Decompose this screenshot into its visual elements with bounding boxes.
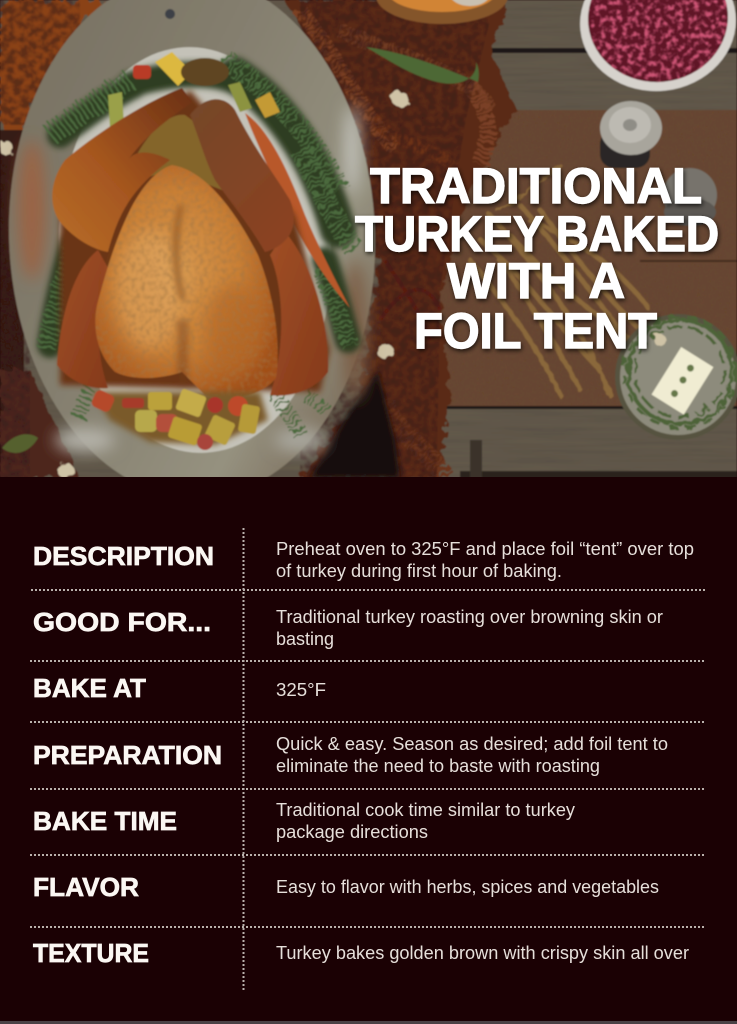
row: bake time — [33, 799, 576, 842]
row: flavor — [33, 872, 659, 902]
skin speckle — [96, 172, 278, 392]
photo: roast turkey on table — [0, 0, 737, 504]
stuffing — [125, 115, 235, 195]
wicker basket — [376, 0, 508, 24]
cream flowers — [0, 91, 666, 479]
dried millet foliage centre — [285, 0, 515, 478]
left rust foliage — [0, 0, 105, 478]
row: bake at — [33, 673, 326, 703]
green leaf bottom left — [2, 434, 38, 453]
title: WITH A — [447, 253, 625, 309]
title — [355, 158, 719, 359]
left wing — [52, 88, 192, 252]
butter dish with rosemary ring — [615, 314, 737, 440]
green bay leaf — [366, 47, 479, 84]
row: flavor: FLAVOR — [33, 872, 139, 902]
dark shadow under platter — [310, 370, 400, 478]
row: good for: GOOD FOR... — [33, 607, 211, 637]
salt shaker — [600, 101, 662, 168]
row: texture: TEXTURE — [33, 938, 149, 968]
row: bake time: BAKE TIME — [33, 806, 177, 836]
right thigh — [190, 99, 294, 252]
turkey dark underlay — [60, 90, 330, 392]
breast bone shade — [172, 205, 186, 300]
row: preparation: eliminate the need to baste with roasting — [276, 755, 600, 776]
row: texture: Turkey bakes golden brown with crispy skin all over — [276, 942, 689, 963]
row: good for: Traditional turkey roasting over browning skin or — [276, 606, 663, 627]
row: bake time: Traditional cook time similar to turkey — [276, 799, 576, 820]
white serving plate — [49, 40, 341, 460]
cleft shade — [176, 320, 190, 385]
row: good for — [33, 606, 663, 649]
breast highlight — [116, 230, 184, 350]
right drumstick — [270, 232, 328, 396]
burlap table runner — [430, 110, 737, 406]
turkey breast — [90, 160, 285, 400]
bottom vegetables — [90, 388, 268, 450]
row: preparation: PREPARATION — [33, 740, 222, 770]
wood table background — [0, 0, 737, 478]
silver platter — [0, 0, 384, 504]
wheat straw bundle — [470, 165, 652, 395]
pepper shaker — [663, 168, 717, 226]
row: bake at: 325°F — [276, 679, 326, 700]
carrot — [245, 113, 350, 308]
title: TRADITIONAL — [370, 158, 702, 214]
row: preparation — [33, 733, 668, 776]
title: FOIL TENT — [414, 303, 657, 359]
top vegetables — [108, 52, 280, 128]
row: texture — [33, 938, 689, 968]
row: good for: basting — [276, 628, 334, 649]
row: description: DESCRIPTION — [33, 541, 214, 571]
rosemary sprigs — [45, 60, 355, 435]
row: preparation: Quick & easy. Season as desired; add foil tent to — [276, 733, 668, 754]
cranberry sauce bowl — [573, 0, 737, 99]
row: bake at: BAKE AT — [33, 673, 146, 703]
rosemary base shade — [50, 74, 348, 345]
row: bake time: package directions — [276, 821, 428, 842]
row: flavor: Easy to flavor with herbs, spices and vegetables — [276, 876, 659, 897]
panel: comparison table — [0, 477, 737, 1024]
row: description — [33, 538, 694, 581]
row: description: of turkey during first hour of baking. — [276, 560, 562, 581]
left drumstick — [57, 250, 112, 388]
row: description: Preheat oven to 325°F and place foil “tent” over top — [276, 538, 694, 559]
